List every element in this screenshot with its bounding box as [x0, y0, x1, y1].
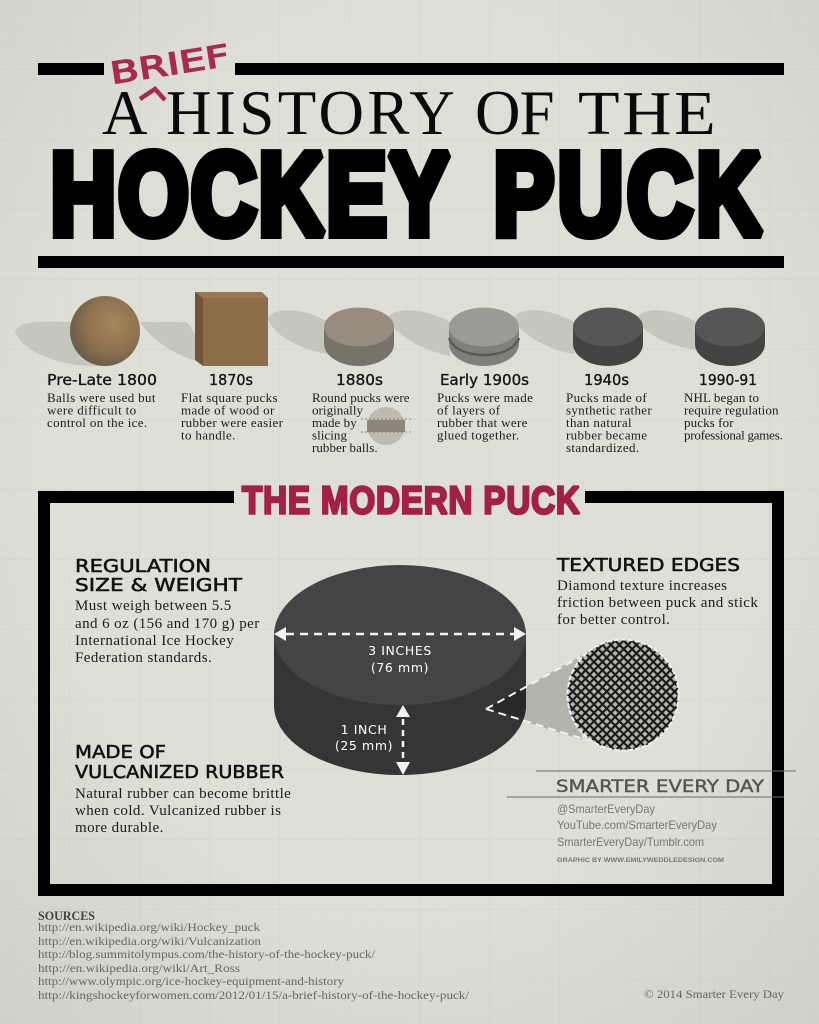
diameter label: 3 INCHES — [368, 643, 432, 658]
description: slicing — [312, 428, 347, 442]
description: synthetic rather — [566, 402, 652, 418]
block: vulcanized rubber — [75, 742, 291, 836]
sources heading: SOURCES — [38, 909, 95, 923]
panel frame — [44, 497, 778, 890]
icon: round puck — [324, 308, 394, 366]
description: pucks for — [684, 415, 734, 430]
title line one: A — [102, 78, 148, 148]
description: Pucks were made — [437, 390, 533, 405]
subheading: MADE OF — [75, 742, 166, 763]
bottom rule — [38, 256, 784, 268]
timeline: pre-late 1800 — [47, 296, 157, 430]
timeline: 1880s — [312, 308, 411, 455]
source links: http://blog.summitolympus.com/the-history-of-the-hockey-puck/ — [38, 947, 376, 961]
icon: sliced ball — [361, 407, 411, 445]
icon: regulation puck — [695, 308, 765, 366]
icon: square puck — [195, 292, 268, 366]
source links: http://www.olympic.org/ice-hockey-equipment-and-history — [38, 974, 344, 988]
description: Balls were used but — [47, 390, 156, 405]
panel: the modern puck — [44, 478, 796, 890]
description: were difficult to — [47, 402, 136, 418]
block: regulation size and weight — [75, 556, 260, 666]
icon: layered puck — [449, 308, 519, 366]
brand name: SMARTER EVERY DAY — [556, 777, 765, 797]
sources — [38, 909, 784, 1002]
social links: @SmarterEveryDay — [557, 802, 655, 816]
handwritten insert: brief: BRIEF — [108, 39, 232, 92]
body text: friction between puck and stick — [557, 595, 758, 611]
description: made of wood or — [181, 402, 275, 418]
icon: diamond texture circle — [568, 640, 678, 750]
design credit: GRAPHIC BY WWW.EMILYWEDDLEDESIGN.COM — [557, 857, 724, 864]
social links: YouTube.com/SmarterEveryDay — [557, 818, 717, 832]
description: originally — [312, 402, 363, 418]
description: to handle. — [181, 428, 236, 442]
description: control on the ice. — [47, 415, 148, 430]
body text: Federation standards. — [75, 650, 212, 666]
body text: more durable. — [75, 820, 164, 836]
title line one: THE — [578, 79, 718, 148]
zoom callout lines — [486, 657, 587, 740]
description: NHL began to — [684, 390, 759, 405]
era label: Pre-Late 1800 — [47, 371, 157, 389]
body text: when cold. Vulcanized rubber is — [75, 803, 281, 819]
rules — [507, 771, 796, 797]
timeline: 1870s — [181, 292, 284, 442]
top rule — [38, 63, 784, 75]
era label: 1880s — [336, 371, 383, 389]
era label: 1940s — [584, 371, 629, 389]
source links: http://en.wikipedia.org/wiki/Vulcanization — [38, 934, 261, 948]
title block — [38, 39, 784, 268]
icon: ball — [70, 296, 140, 366]
icon: synthetic puck — [573, 308, 643, 366]
title line one — [102, 78, 718, 148]
source links: http://kingshockeyforwomen.com/2012/01/15/a-brief-history-of-the-hockey-puck/ — [38, 988, 470, 1002]
source links: http://en.wikipedia.org/wiki/Art_Ross — [38, 961, 240, 975]
copyright: © 2014 Smarter Every Day — [644, 987, 784, 1001]
description: Flat square pucks — [181, 390, 278, 405]
body text: Must weigh between 5.5 — [75, 598, 232, 614]
description: of layers of — [437, 402, 501, 418]
subheading: REGULATION — [75, 556, 211, 577]
era label: 1990-91 — [699, 371, 757, 389]
main puck diagram — [274, 565, 526, 775]
description: rubber that were — [437, 415, 528, 430]
description: glued together. — [437, 428, 520, 442]
description: rubber became — [566, 428, 647, 442]
title line two — [51, 130, 766, 260]
subheading: SIZE & WEIGHT — [75, 575, 243, 596]
era label: Early 1900s — [440, 371, 529, 389]
description: made by — [312, 415, 357, 430]
description: than natural — [566, 415, 632, 430]
subheading: TEXTURED EDGES — [556, 555, 740, 576]
body text: and 6 oz (156 and 170 g) per — [75, 616, 260, 632]
panel heading: THE MODERN PUCK — [242, 478, 581, 522]
description: professional games. — [684, 428, 783, 442]
description: Round pucks were — [312, 390, 410, 405]
height arrow — [396, 705, 410, 775]
era label: 1870s — [209, 371, 253, 389]
title line one: OF — [475, 78, 554, 148]
title line two: PUCK — [494, 130, 766, 260]
handwritten insert: brief — [108, 39, 232, 100]
timeline: 1990-91 — [684, 308, 783, 442]
block: textured edges — [556, 555, 758, 628]
description: require regulation — [684, 402, 779, 418]
diameter arrow — [274, 627, 526, 641]
description: rubber balls. — [312, 440, 378, 455]
body text: International Ice Hockey — [75, 633, 234, 649]
social links: SmarterEveryDay/Tumblr.com — [557, 835, 704, 849]
timeline: early 1900s — [437, 308, 533, 442]
title line two: HOCKEY — [51, 130, 452, 260]
block: smarter every day — [507, 771, 796, 864]
description: rubber were easier — [181, 415, 284, 430]
height label: (25 mm) — [335, 738, 393, 753]
subheading: VULCANIZED RUBBER — [75, 762, 284, 783]
timeline shadows — [15, 310, 696, 366]
description: standardized. — [566, 440, 640, 455]
source links: http://en.wikipedia.org/wiki/Hockey_puck — [38, 920, 260, 934]
body text: Diamond texture increases — [557, 578, 727, 594]
height label: 1 INCH — [341, 722, 387, 737]
diameter label: (76 mm) — [371, 660, 429, 675]
description: Pucks made of — [566, 390, 647, 405]
timeline: 1940s — [566, 308, 652, 455]
body text: Natural rubber can become brittle — [75, 786, 291, 802]
title line one: HISTORY — [166, 78, 458, 148]
body text: for better control. — [557, 612, 670, 628]
zoom cone — [486, 655, 582, 740]
